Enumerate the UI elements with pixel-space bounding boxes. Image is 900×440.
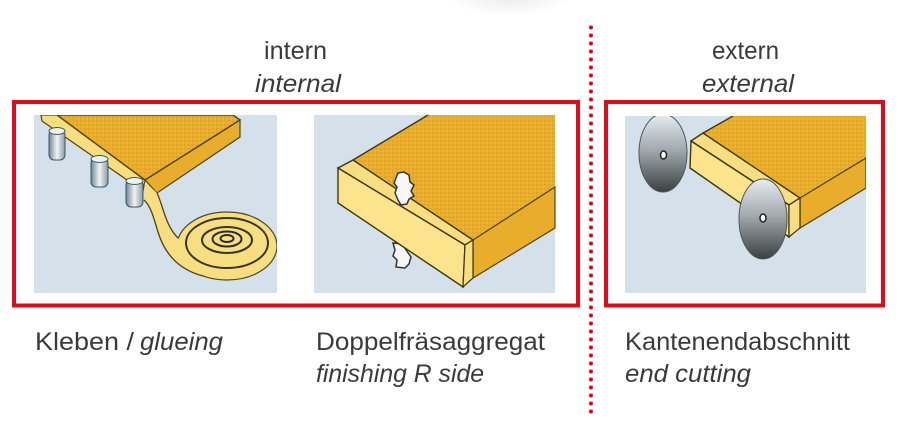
edge band and board side [41,115,145,191]
edge strip [338,160,473,245]
lower cutter [393,243,411,268]
panel: internal processes frame [14,102,578,306]
board top [703,116,866,198]
end strip [789,198,800,237]
illustration: glueing [34,115,277,293]
front face [690,141,789,237]
caption: end cutting: end cutting [625,360,751,388]
heading: extern: external [702,70,795,98]
caption: end cutting: Kantenendabschnitt [625,328,850,356]
caption: end cutting [625,328,850,388]
heading: extern [702,37,795,98]
heading: extern: extern [712,37,779,65]
heading: intern [255,37,343,98]
edge strip [691,133,800,205]
board top [353,115,555,240]
caption: finishing: finishing R side [316,360,484,388]
divider: dotted line [589,28,593,415]
tape roll and strip [144,182,277,280]
caption: glueing: Kleben / [35,328,134,356]
caption: finishing [316,328,545,388]
illustration: end cutting [625,114,866,293]
board top [57,115,240,180]
caption: glueing: glueing [140,328,223,356]
heading: intern: internal [255,70,343,98]
caption: finishing: Doppelfräsaggregat [316,328,545,356]
background smudge [450,0,570,16]
rollers [49,128,143,207]
panel: external process frame [606,102,883,306]
upper cutter [394,172,414,205]
right face [800,158,866,228]
end strip [463,240,473,287]
caption: glueing [35,328,223,356]
illustration: finishing [314,115,555,293]
saw disc right [739,179,787,259]
saw disc left [639,114,687,192]
heading: intern: intern [264,37,327,65]
right face [473,187,555,278]
front face [338,168,465,287]
